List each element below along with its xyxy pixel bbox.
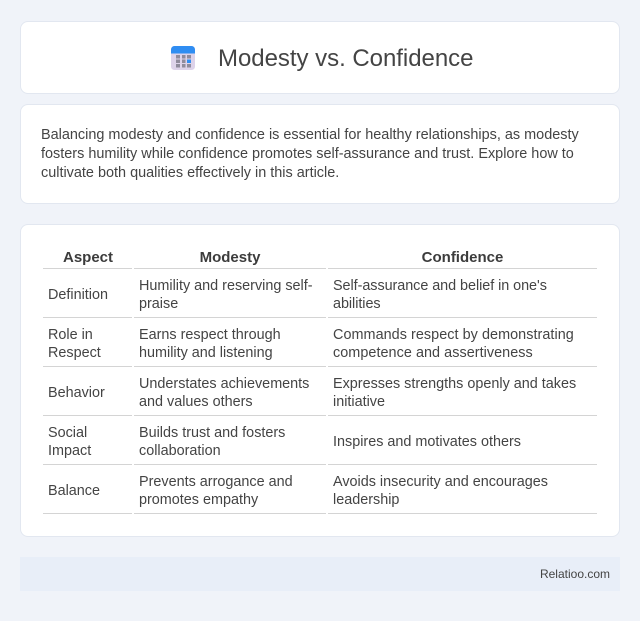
row: definition: Definition <box>48 287 108 303</box>
behavior: modesty: and values others <box>139 394 253 410</box>
icon: calendar <box>171 46 195 70</box>
row: role in respect: Role in <box>48 327 93 343</box>
balance: modesty: promotes empathy <box>139 492 258 508</box>
row: balance: Balance <box>48 483 100 499</box>
behavior: modesty <box>139 376 309 410</box>
panel: title card <box>20 21 620 94</box>
panel: comparison table <box>20 224 620 537</box>
intro text: cultivate both qualities effectively in this article. <box>41 165 339 181</box>
row: social impact: Social <box>48 425 87 441</box>
definition: modesty <box>139 278 313 312</box>
row: social impact <box>48 425 92 459</box>
behavior: confidence <box>333 376 576 410</box>
definition: confidence: abilities <box>333 296 381 312</box>
definition: modesty: praise <box>139 296 178 312</box>
balance: confidence <box>333 474 548 508</box>
role: confidence: competence and assertiveness <box>333 345 533 361</box>
behavior: confidence: initiative <box>333 394 385 410</box>
social impact: modesty: Builds trust and fosters <box>139 425 285 441</box>
table header: confidence: Confidence <box>422 249 503 266</box>
role: modesty: humility and listening <box>139 345 273 361</box>
intro text: Balancing modesty and confidence is essential for healthy relationships, as modesty <box>41 127 579 143</box>
balance: confidence: leadership <box>333 492 399 508</box>
role: modesty <box>139 327 281 361</box>
row: role in respect: Respect <box>48 345 101 361</box>
balance: modesty <box>139 474 293 508</box>
table header: aspect: Aspect <box>63 249 113 266</box>
row: behavior: Behavior <box>48 385 105 401</box>
behavior: modesty: Understates achievements <box>139 376 309 392</box>
panel: introduction <box>20 104 620 204</box>
title: Modesty vs. Confidence <box>218 45 473 72</box>
footer text: Relatioo.com: Relatioo.com <box>540 567 610 581</box>
definition: confidence: Self-assurance and belief in one's <box>333 278 547 294</box>
behavior: confidence: Expresses strengths openly and takes <box>333 376 576 392</box>
definition: confidence <box>333 278 547 312</box>
social impact: confidence: Inspires and motivates others <box>333 434 521 450</box>
role: modesty: Earns respect through <box>139 327 281 343</box>
role: confidence: Commands respect by demonstrating <box>333 327 574 343</box>
social impact: modesty <box>139 425 285 459</box>
intro text: fosters humility while confidence promotes self-assurance and trust. Explore how to <box>41 146 574 162</box>
table header: modesty: Modesty <box>200 249 260 266</box>
social impact: modesty: collaboration <box>139 443 221 459</box>
balance: confidence: Avoids insecurity and encourages <box>333 474 548 490</box>
definition: modesty: Humility and reserving self- <box>139 278 313 294</box>
role: confidence <box>333 327 574 361</box>
row: social impact: Impact <box>48 443 91 459</box>
balance: modesty: Prevents arrogance and <box>139 474 293 490</box>
footer bar <box>20 557 620 591</box>
intro text <box>41 127 579 181</box>
row: role in respect <box>48 327 101 361</box>
